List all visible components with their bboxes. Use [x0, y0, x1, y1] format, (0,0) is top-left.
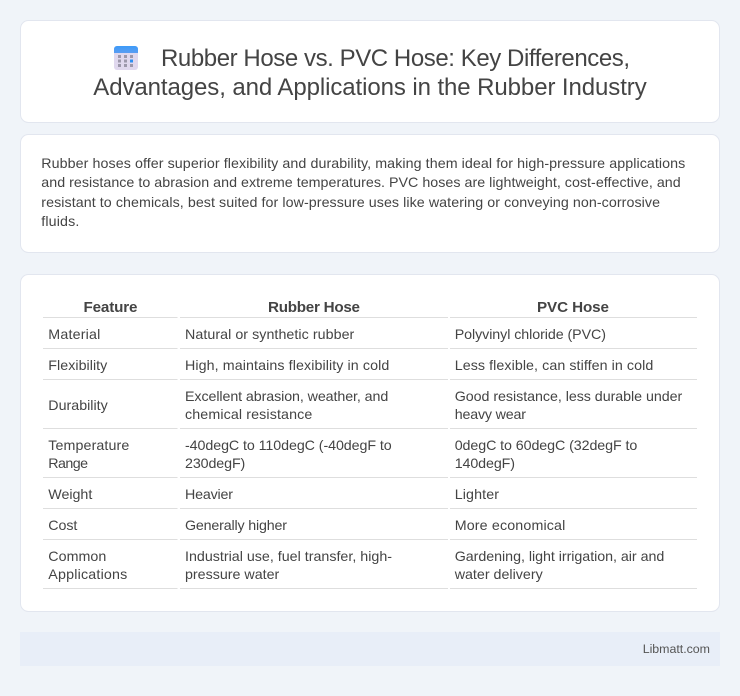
row: common applications: Applications	[48, 567, 127, 583]
row: temperature range	[43, 438, 697, 478]
row: temperature range: 140degF)	[455, 456, 515, 472]
row: temperature range: Temperature	[48, 438, 129, 454]
row: cost: Generally higher	[185, 518, 287, 534]
row: durability	[43, 389, 697, 429]
row: temperature range: -40degC to 110degC (-40degF to	[185, 438, 392, 454]
row: weight: Weight	[48, 487, 92, 503]
row: temperature range: 230degF)	[185, 456, 245, 472]
footer credit: Libmatt.com	[643, 642, 710, 656]
row: material: Polyvinyl chloride (PVC)	[455, 327, 606, 343]
row: durability: Good resistance, less durable under	[455, 389, 683, 405]
intro paragraph: resistant to chemicals, best suited for low-pressure uses like watering or conveying non-corrosive	[41, 195, 660, 211]
panel: intro text	[20, 134, 720, 252]
table header row	[43, 299, 697, 318]
intro paragraph: fluids.	[41, 214, 79, 230]
row: cost: More economical	[455, 518, 565, 534]
icon: calendar	[114, 46, 138, 70]
row: common applications: Industrial use, fuel transfer, high-	[185, 549, 392, 565]
panel: comparison table	[20, 274, 720, 612]
title: Advantages, and Applications in the Rubber Industry	[93, 74, 647, 101]
row: common applications: Common	[48, 549, 106, 565]
row: common applications: Gardening, light irrigation, air and	[455, 549, 664, 565]
row: temperature range: 0degC to 60degC (32degF to	[455, 438, 637, 454]
row: material	[43, 327, 697, 349]
row: durability: Excellent abrasion, weather, and	[185, 389, 388, 405]
row: material: Natural or synthetic rubber	[185, 327, 355, 343]
footer bar	[20, 632, 720, 666]
row: flexibility: Less flexible, can stiffen in cold	[455, 358, 653, 374]
row: weight: Lighter	[455, 487, 499, 503]
row: common applications: pressure water	[185, 567, 280, 583]
table header row: Feature	[84, 299, 138, 316]
row: durability: heavy wear	[455, 407, 526, 423]
row: weight: Heavier	[185, 487, 233, 503]
row: material: Material	[48, 327, 100, 343]
row: cost	[43, 518, 697, 540]
row: flexibility: High, maintains flexibility in cold	[185, 358, 389, 374]
row: flexibility	[43, 358, 697, 380]
intro paragraph: Rubber hoses offer superior flexibility and durability, making them ideal for high-pressure applications	[41, 156, 685, 172]
intro paragraph: and resistance to abrasion and extreme temperatures. PVC hoses are lightweight, cost-effective, and	[41, 175, 681, 191]
row: cost: Cost	[48, 518, 77, 534]
table header row: Rubber Hose	[268, 299, 360, 316]
row: common applications: water delivery	[454, 567, 544, 583]
row: flexibility: Flexibility	[48, 358, 108, 374]
row: common applications	[43, 549, 697, 589]
row: temperature range: Range	[48, 456, 88, 472]
title: Rubber Hose vs. PVC Hose: Key Differences,	[161, 45, 630, 72]
intro paragraph	[41, 156, 685, 230]
table header row: PVC Hose	[537, 299, 609, 316]
row: durability: Durability	[48, 398, 109, 414]
panel: header	[20, 20, 720, 122]
row: weight	[43, 487, 697, 509]
title	[93, 45, 647, 101]
row: durability: chemical resistance	[185, 407, 312, 423]
